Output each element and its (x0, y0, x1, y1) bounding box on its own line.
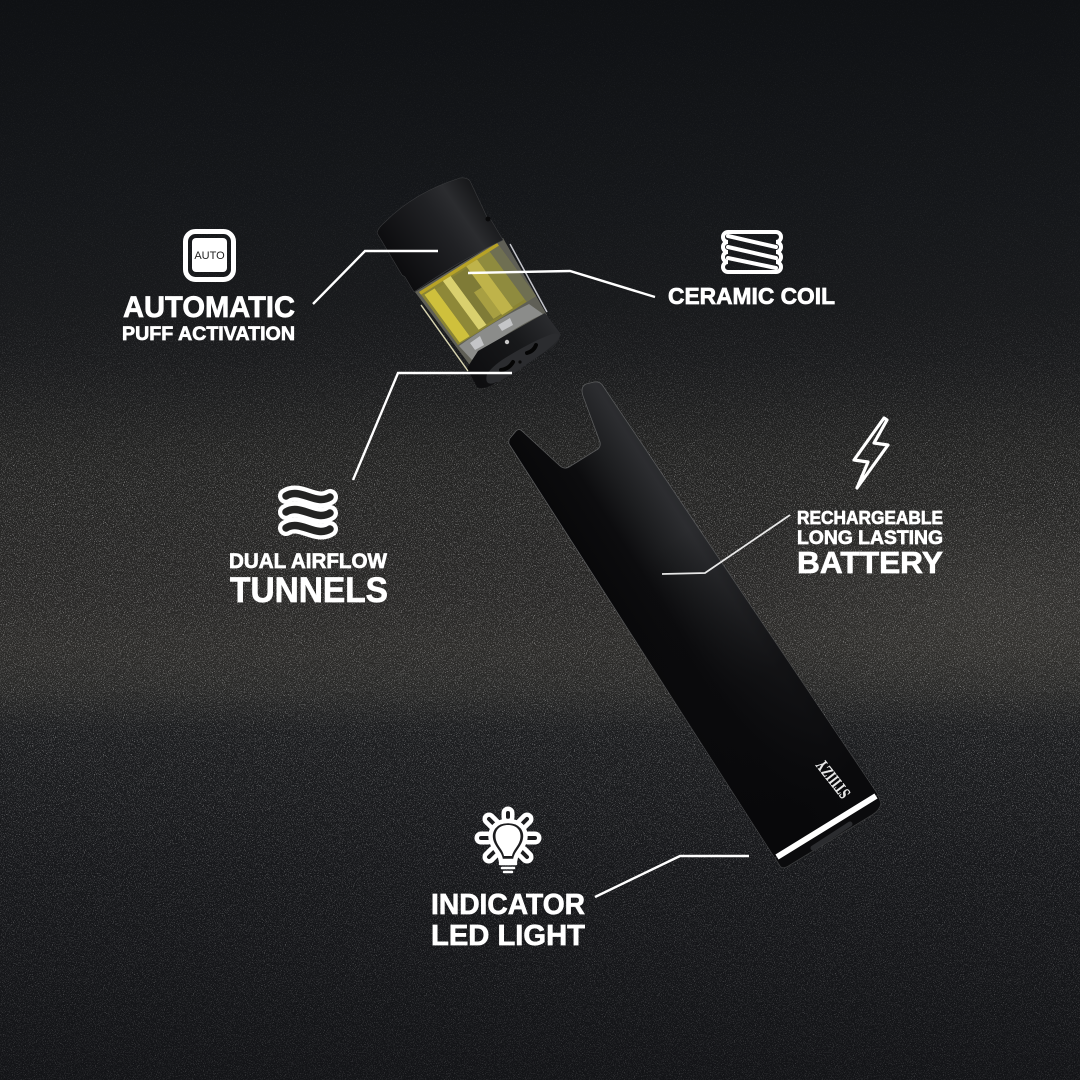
callout: dual airflow (229, 494, 388, 610)
callout: dual airflow: TUNNELS (230, 571, 388, 610)
callout: automatic (122, 232, 295, 345)
silver reflections (459, 304, 543, 360)
callout: indicator led: LED LIGHT (431, 920, 585, 952)
icon: lightning bolt (854, 418, 888, 488)
callout: dual airflow: DUAL AIRFLOW (229, 550, 387, 573)
icon: auto button: AUTO (194, 250, 225, 262)
pod cartridge (377, 178, 560, 388)
callout: indicator led (431, 813, 585, 952)
icon: coil (723, 232, 781, 272)
callout: ceramic coil: CERAMIC COIL (668, 283, 835, 309)
callout: indicator led: INDICATOR (431, 889, 585, 921)
callout: battery: LONG LASTING (797, 528, 943, 549)
callout: ceramic coil (668, 232, 835, 309)
brand mark: STIIIZY (812, 756, 854, 802)
pod bottom cap (467, 313, 560, 388)
leader lines (313, 251, 790, 897)
callout: battery (797, 418, 943, 580)
battery pen body (509, 382, 881, 868)
pen bottom cap (775, 795, 881, 868)
LED ring (777, 796, 876, 857)
yellow liquid facets (419, 243, 536, 345)
callout: automatic: PUFF ACTIVATION (122, 324, 295, 345)
charging port (813, 824, 850, 848)
icon: airflow waves (286, 494, 330, 531)
icon: light bulb (481, 813, 535, 872)
callout: automatic: AUTOMATIC (123, 291, 295, 324)
icon: auto button (186, 232, 234, 280)
callout: battery: BATTERY (797, 545, 943, 580)
callout: battery: RECHARGEABLE (797, 508, 943, 528)
glass tank shell (415, 238, 547, 368)
pod top cap (377, 178, 503, 292)
